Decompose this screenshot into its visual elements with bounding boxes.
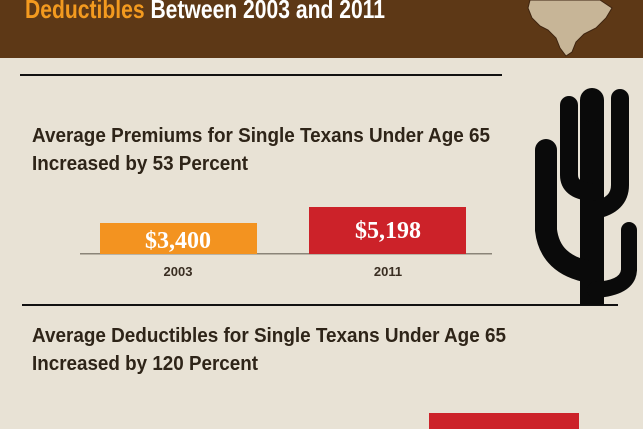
- text: Increased by 120 Percent: [32, 353, 258, 375]
- icon: cactus: [546, 98, 629, 305]
- divider middle: [22, 304, 618, 306]
- bar 2011 deductible: [429, 413, 579, 429]
- icon: texas map: [528, 0, 612, 56]
- bar 2003: [100, 223, 257, 279]
- bar 2003: $3,400: [145, 228, 211, 254]
- bar 2011: 2011: [374, 264, 402, 279]
- bar 2011: [309, 207, 466, 279]
- bar chart: premiums: [80, 207, 492, 279]
- bar 2011: $5,198: [355, 218, 421, 244]
- text: Increased by 53 Percent: [32, 153, 248, 175]
- bar 2003: 2003: [164, 264, 192, 279]
- header banner: [0, 0, 643, 58]
- heading: premiums: Average Premiums for Single Texans Under Age 65: [32, 125, 490, 147]
- divider top: [20, 74, 502, 76]
- heading: deductibles: Average Deductibles for Single Texans Under Age 65: [32, 325, 506, 347]
